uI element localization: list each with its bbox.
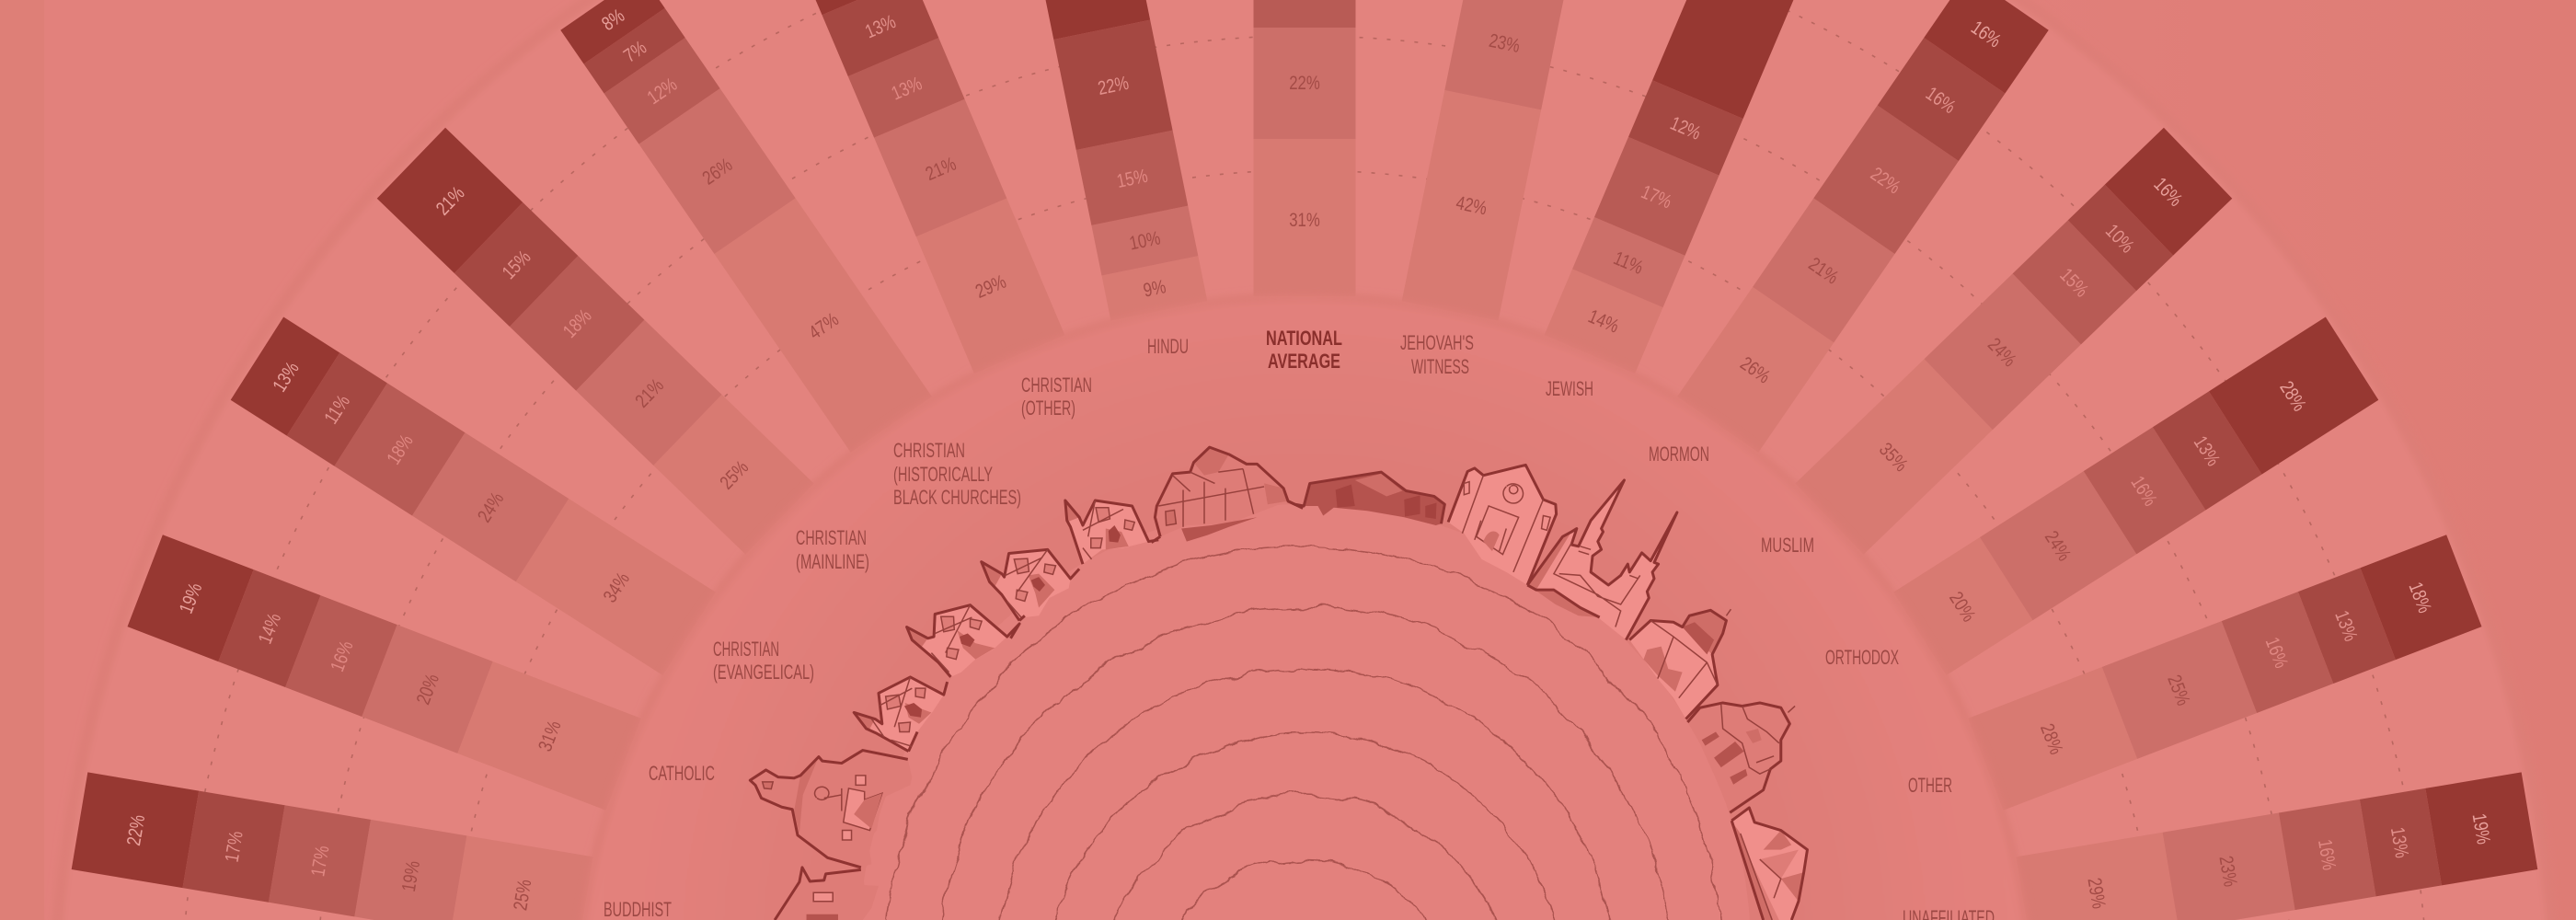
- bar: Christian historically black churches: 26%: [699, 155, 737, 190]
- bar: National average: [1253, 0, 1356, 296]
- bar: Christian other: [774, 0, 1064, 374]
- label: Christian evangelical: CHRISTIAN: [713, 638, 779, 661]
- bar: Buddhist: 22%: [123, 813, 150, 847]
- bar: Catholic: 14%: [255, 611, 286, 647]
- bar: Muslim: 16%: [2149, 174, 2186, 211]
- bar: Christian evangelical: 18%: [384, 431, 418, 468]
- inner disc: [575, 296, 2034, 920]
- bar: Christian evangelical: 24%: [474, 489, 509, 526]
- label: Christian historically black churches: CHRISTIAN: [893, 439, 965, 462]
- bar: Unaffiliated: 29%: [2083, 877, 2109, 911]
- bar: Jewish: 17%: [1638, 181, 1674, 213]
- bar: Unaffiliated: 16%: [2313, 838, 2340, 872]
- label: Catholic: CATHOLIC: [649, 762, 715, 785]
- bar: Unaffiliated: 19%: [2467, 812, 2494, 846]
- label: Orthodox: ORTHODOX: [1825, 646, 1899, 669]
- label: Christian mainline: CHRISTIAN: [796, 526, 867, 549]
- icon: church house 1: [854, 677, 948, 752]
- bar: Jehovah's Witness: [1402, 0, 1579, 321]
- bar: Orthodox: 13%: [2189, 432, 2224, 470]
- icon: twin spire cathedral: [1527, 480, 1677, 640]
- bar: Buddhist: 17%: [222, 830, 247, 864]
- icon: mosque: [1629, 609, 1731, 719]
- label: Christian other: [1021, 374, 1092, 420]
- label: Christian other: CHRISTIAN: [1021, 374, 1092, 397]
- label: Christian evangelical: (EVANGELICAL): [713, 661, 814, 684]
- label: Hindu: HINDU: [1147, 335, 1189, 358]
- bar: Muslim: 10%: [2101, 221, 2138, 258]
- bar: Muslim: 15%: [2055, 265, 2092, 302]
- globe: [858, 504, 1751, 920]
- label: Christian historically black churches: [893, 439, 1021, 509]
- bar: Catholic: 16%: [327, 638, 358, 674]
- bar: Mormon: 21%: [1804, 254, 1842, 289]
- bar: Muslim: 24%: [1984, 334, 2020, 372]
- bar: Christian historically black churches: 12%: [644, 74, 682, 109]
- icon: opera house shells: [1731, 808, 1807, 920]
- bar: Unaffiliated: 23%: [2214, 855, 2240, 889]
- icon: synagogue: [1448, 465, 1557, 585]
- bar: Buddhist: 25%: [511, 878, 536, 912]
- label: Christian mainline: [796, 526, 869, 573]
- label: Christian mainline: (MAINLINE): [796, 550, 869, 573]
- bar: Hindu: 22%: [1096, 73, 1131, 100]
- label: National average: [1266, 327, 1342, 373]
- bar: Christian evangelical: 34%: [600, 569, 635, 606]
- left edge strip: [0, 0, 44, 920]
- bar: Christian mainline: [377, 128, 814, 555]
- bar: Christian other: 21%: [923, 154, 960, 186]
- label: Christian other: (OTHER): [1021, 397, 1075, 420]
- bar: Mormon: 16%: [1922, 83, 1960, 119]
- bar: Orthodox: 20%: [1945, 588, 1979, 626]
- bar: Jehovah's Witness: 42%: [1454, 192, 1489, 220]
- bar: Muslim: [1795, 128, 2232, 555]
- bar: Christian mainline: 25%: [717, 457, 753, 494]
- wavy concentric globe lines: [884, 546, 1725, 920]
- icon: Buddhist temple: [775, 868, 879, 920]
- icon: church house 3: [982, 549, 1079, 621]
- label: National average: AVERAGE: [1268, 350, 1340, 373]
- bar: Hindu: [1008, 0, 1207, 321]
- bar: Other: 18%: [2404, 580, 2435, 616]
- bar: Jewish: 14%: [1585, 306, 1622, 338]
- label: Christian evangelical: [713, 638, 814, 684]
- bar: Jewish: 12%: [1667, 113, 1704, 144]
- icon: domed hut: [1152, 447, 1303, 543]
- bar: Christian other: 13%: [862, 11, 899, 43]
- bar: Mormon: 16%: [1967, 17, 2005, 52]
- bar: Buddhist: [72, 772, 593, 920]
- bar: Christian mainline: 15%: [499, 247, 535, 283]
- label: Jehovah's Witness: JEHOVAH'S: [1400, 331, 1474, 354]
- bar: Catholic: [127, 535, 641, 811]
- bar: Christian historically black churches: [560, 0, 932, 453]
- bar: Christian other: 13%: [889, 74, 926, 105]
- bar: Catholic: 31%: [535, 718, 566, 754]
- bar: Christian historically black churches: 8%: [598, 6, 629, 36]
- bar: Christian mainline: 18%: [559, 305, 596, 342]
- bar: Muslim: 35%: [1875, 439, 1912, 477]
- label: Jehovah's Witness: WITNESS: [1411, 355, 1469, 378]
- bar: Other: 13%: [2330, 608, 2361, 645]
- label: Jehovah's Witness: [1400, 331, 1474, 378]
- bar: Christian evangelical: 13%: [270, 359, 304, 396]
- bar: Buddhist: 17%: [308, 845, 334, 879]
- bar: Christian other: 29%: [972, 271, 1009, 303]
- label: National average: NATIONAL: [1266, 327, 1342, 350]
- bar: Orthodox: 24%: [2040, 527, 2075, 565]
- bar: Orthodox: [1893, 317, 2378, 675]
- bar: Buddhist: 19%: [398, 859, 425, 893]
- icon: orthodox church: [1687, 703, 1795, 812]
- bar: Other: 28%: [2036, 721, 2066, 757]
- right side buildings: [1288, 465, 1807, 920]
- bar: Christian mainline: 21%: [632, 375, 669, 412]
- icon: church house 2: [907, 605, 1019, 677]
- category labels: [604, 327, 1995, 920]
- bar: Other: 16%: [2260, 635, 2292, 672]
- bar: Jewish: 11%: [1610, 247, 1646, 280]
- label: Jewish: JEWISH: [1546, 377, 1593, 400]
- bar: Other: 25%: [2163, 673, 2193, 708]
- icon: flat temple: [1288, 472, 1444, 525]
- bar: Hindu: 15%: [1115, 166, 1150, 192]
- label: Christian historically black churches: (HISTORICALLY: [893, 463, 993, 486]
- label: Other: OTHER: [1908, 774, 1952, 797]
- bar: Mormon: 26%: [1736, 353, 1774, 388]
- bar: Mormon: 22%: [1867, 164, 1904, 199]
- bar: Orthodox: 16%: [2126, 473, 2161, 511]
- bar: Catholic: 19%: [176, 581, 207, 616]
- bar: National average: 31%: [1289, 210, 1320, 232]
- left side buildings: [750, 447, 1303, 920]
- bar: Unaffiliated: [2016, 772, 2537, 920]
- bar: Catholic: 20%: [413, 672, 444, 707]
- icon: church house 4: [1065, 500, 1158, 564]
- bar: Hindu: 10%: [1128, 228, 1162, 255]
- bar: Jewish: [1545, 0, 1835, 374]
- bar: Orthodox: 28%: [2275, 378, 2310, 415]
- bar: Jehovah's Witness: 23%: [1487, 30, 1522, 58]
- icon: Catholic church: [750, 751, 912, 868]
- label: Muslim: MUSLIM: [1761, 534, 1814, 557]
- bar: Other: [1968, 535, 2482, 811]
- bar: Christian historically black churches: 47%: [805, 309, 843, 344]
- bar: Mormon: [1677, 0, 2049, 453]
- bar: National average: 22%: [1289, 73, 1320, 95]
- label: Christian historically black churches: BLACK CHURCHES): [893, 486, 1021, 509]
- bar: Unaffiliated: 13%: [2386, 825, 2412, 860]
- bar: Christian evangelical: 11%: [321, 392, 355, 428]
- label: Mormon: MORMON: [1649, 443, 1709, 466]
- bar: Christian historically black churches: 7%: [620, 37, 650, 67]
- bar: Hindu: 9%: [1142, 277, 1167, 302]
- bar: Christian mainline: 21%: [432, 183, 469, 220]
- bar: Christian evangelical: [231, 317, 716, 675]
